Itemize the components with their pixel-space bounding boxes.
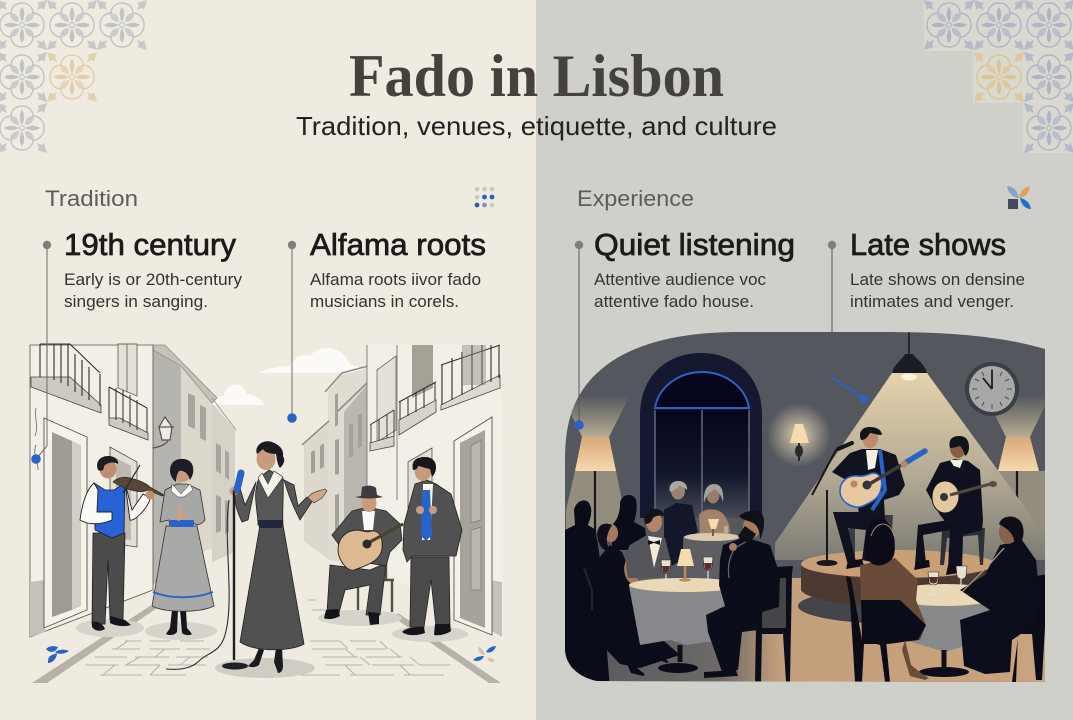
stage light cone xyxy=(775,373,1045,560)
callout: 19th century: 19th century xyxy=(64,228,237,262)
wall clock xyxy=(965,362,1019,416)
street curbs xyxy=(32,606,501,683)
illustration: Alfama street scene xyxy=(30,344,503,683)
figure: audience back couple xyxy=(664,481,730,570)
audience silhouettes, left xyxy=(565,495,648,690)
far buildings, left side xyxy=(153,345,236,585)
clouds xyxy=(212,348,367,405)
icon: dot grid xyxy=(475,187,494,207)
callout: Late shows: Late shows xyxy=(850,228,1006,262)
callout: Quiet listening: attentive fado house. xyxy=(594,293,754,311)
callout: 19th century xyxy=(64,228,243,311)
illustration: fado house interior xyxy=(560,330,1050,690)
decoration: blue leaves left xyxy=(46,646,69,663)
figure: woman with clasped hands xyxy=(145,459,217,640)
callout: Alfama roots: musicians in corels. xyxy=(310,293,459,311)
icon: petals xyxy=(1007,186,1031,209)
figure: violinist xyxy=(76,456,164,637)
far buildings, right side xyxy=(302,366,368,566)
callout: Alfama roots xyxy=(310,228,486,311)
section label: Experience: Experience xyxy=(577,186,694,211)
callout: Alfama roots: Alfama roots xyxy=(310,228,486,262)
background: left panel xyxy=(0,0,536,720)
callout: Quiet listening: Attentive audience voc xyxy=(594,271,766,289)
balcony, lower left xyxy=(109,387,148,440)
stage platform xyxy=(798,550,1000,624)
figure: standing singer xyxy=(392,457,468,642)
street lamp xyxy=(153,417,174,448)
balcony, upper left xyxy=(31,344,101,413)
leader line: 19th century xyxy=(31,241,51,464)
leader line: Quiet listening xyxy=(574,241,584,430)
callout: 19th century: singers in sanging. xyxy=(64,293,208,311)
wall sconce xyxy=(769,405,829,465)
balcony, upper right xyxy=(412,345,500,410)
decoration: leaves right xyxy=(473,646,496,662)
figure: man at right with chair xyxy=(960,516,1048,682)
figure: lead guitarist xyxy=(832,427,925,569)
floor lamp left xyxy=(566,398,628,540)
callout: Alfama roots: Alfama roots iivor fado xyxy=(310,271,481,289)
figure: man in tuxedo xyxy=(626,509,675,578)
azulejo tiles: top right corner xyxy=(924,0,1073,153)
leader line: Alfama roots xyxy=(287,241,297,423)
figure: bearded man with chair xyxy=(704,511,793,682)
upper window, left wall xyxy=(118,344,137,396)
figure: singer with microphone xyxy=(215,441,327,678)
figure: woman seen from behind xyxy=(846,518,929,682)
callout: Quiet listening xyxy=(594,228,795,311)
floor lamp right xyxy=(996,398,1045,535)
callout: Late shows: Late shows on densine xyxy=(850,271,1025,289)
table left with lamp and glasses xyxy=(629,549,725,673)
window, left wall xyxy=(110,447,137,547)
balcony, middle right xyxy=(399,382,436,435)
figure: seated guitarist xyxy=(318,486,403,626)
table right xyxy=(909,566,990,677)
section label: Tradition: Tradition xyxy=(45,186,138,211)
cobblestones xyxy=(85,600,450,675)
door, right wall xyxy=(454,417,492,635)
figure: second guitarist xyxy=(914,436,997,575)
wall xyxy=(560,330,1050,685)
callout: Quiet listening: Quiet listening xyxy=(594,228,795,262)
leader line: Late shows xyxy=(828,241,868,403)
callout: Late shows xyxy=(850,228,1025,311)
callout: Late shows: intimates and venger. xyxy=(850,293,1014,311)
background: right panel xyxy=(536,0,1073,720)
left wall xyxy=(30,344,174,637)
microphone stand xyxy=(166,473,248,670)
small table with candle xyxy=(683,519,740,580)
azulejo tiles: top left corner xyxy=(0,0,147,153)
title: Fado in Lisbon xyxy=(349,43,724,109)
arched window xyxy=(640,353,762,518)
floor xyxy=(560,578,1050,685)
microphone on stage xyxy=(812,443,852,566)
balcony, lower right xyxy=(370,410,394,451)
right wall xyxy=(367,345,503,640)
figure: woman at table xyxy=(597,524,680,676)
door, left wall xyxy=(44,418,87,628)
callout: 19th century: Early is or 20th-century xyxy=(64,271,243,289)
pendant lamp xyxy=(892,332,927,380)
chair, left xyxy=(584,568,592,610)
window, right wall xyxy=(408,448,432,550)
subtitle: Tradition, venues, etiquette, and culture xyxy=(296,111,777,141)
